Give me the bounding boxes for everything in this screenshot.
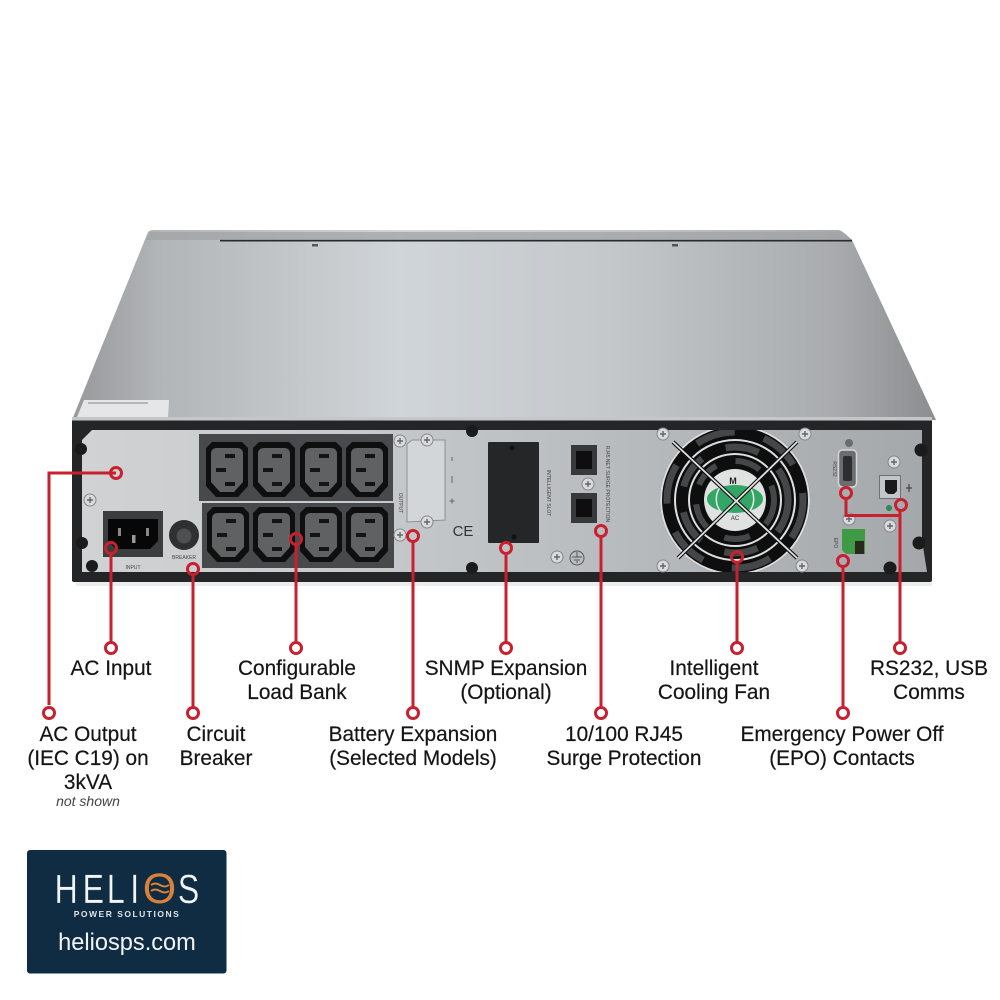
label: load bank: Configurable xyxy=(238,657,356,680)
callout: AC input xyxy=(106,542,116,654)
callout: circuit breaker xyxy=(188,564,198,718)
callout: RS232 and USB xyxy=(840,488,906,654)
callout: AC output xyxy=(44,468,122,718)
panel: output outlet bank: OUTPUT xyxy=(397,493,403,513)
callout: load bank xyxy=(290,534,302,654)
label: battery expansion: Battery Expansion xyxy=(329,723,497,746)
label: battery expansion: (Selected Models) xyxy=(329,747,497,770)
callout: SNMP expansion xyxy=(500,542,512,654)
logo panel: Helios xyxy=(27,850,226,974)
label: AC output: not shown xyxy=(56,793,120,809)
callout: RJ45 surge protection xyxy=(596,526,606,718)
label: cooling fan xyxy=(658,657,770,704)
panel: battery expansion cover xyxy=(394,434,473,541)
label: cooling fan: Cooling Fan xyxy=(658,681,770,704)
logo tagline: POWER SOLUTIONS xyxy=(74,909,180,919)
label: RJ45 surge protection: Surge Protection xyxy=(547,747,701,770)
label: RS232 and USB: Comms xyxy=(893,681,965,704)
label: RS232 and USB: RS232, USB xyxy=(870,657,988,680)
icon: USB port xyxy=(880,456,912,532)
panel: battery expansion cover: CE xyxy=(453,523,473,540)
icon: RJ45 ports: RJ45 NET SURGE PROTECTION xyxy=(604,446,610,523)
label: EPO contacts: (EPO) Contacts xyxy=(769,747,915,770)
label: battery expansion xyxy=(329,723,497,770)
icon: RS232 port: RS232 xyxy=(831,461,837,477)
panel: SNMP expansion slot: INTELLIGENT SLOT xyxy=(545,470,551,516)
label: AC output xyxy=(27,723,149,809)
logo website: heliosps.com xyxy=(58,930,196,956)
logo icon: orange O with waves: O xyxy=(143,865,176,913)
icon: cooling fan: AC xyxy=(731,516,740,522)
icon: AC input socket: INPUT xyxy=(126,565,140,571)
label: SNMP expansion: (Optional) xyxy=(460,681,552,704)
label: RJ45 surge protection xyxy=(547,723,701,770)
label: load bank xyxy=(238,657,356,704)
callout: cooling fan xyxy=(732,552,742,654)
label: circuit breaker: Breaker xyxy=(180,747,252,770)
label: EPO contacts xyxy=(740,723,944,770)
label: AC output: AC Output xyxy=(39,723,137,746)
icon: cooling fan: M xyxy=(729,476,737,486)
infographic: UPS rear panel xyxy=(27,230,987,974)
panel: UPS rear face xyxy=(72,417,932,582)
label: AC output: (IEC C19) on xyxy=(27,747,149,770)
label: SNMP expansion: SNMP Expansion xyxy=(425,657,587,680)
label: RS232 and USB xyxy=(870,657,988,704)
callout: EPO contacts xyxy=(838,556,848,718)
label: cooling fan: Intelligent xyxy=(669,657,759,680)
label: EPO contacts: Emergency Power Off xyxy=(740,723,944,746)
icon: circuit breaker: BREAKER xyxy=(172,555,196,561)
icon: cooling fan xyxy=(657,425,811,575)
icon: EPO terminal xyxy=(832,513,865,554)
label: RJ45 surge protection: 10/100 RJ45 xyxy=(565,723,683,746)
label: AC output: 3kVA xyxy=(64,771,112,794)
label: load bank: Load Bank xyxy=(247,681,347,704)
label: SNMP expansion xyxy=(425,657,587,704)
panel: output outlet bank xyxy=(199,434,403,568)
icon: circuit breaker xyxy=(169,520,199,561)
icon: ground terminal xyxy=(551,551,584,565)
logo wordmark letters: HELIS xyxy=(55,866,199,912)
label: AC input: AC Input xyxy=(71,657,152,680)
shadow under unit xyxy=(76,582,932,586)
icon: AC input socket xyxy=(103,511,163,571)
label: circuit breaker: Circuit xyxy=(187,723,246,746)
panel: SNMP expansion slot xyxy=(488,442,551,543)
icon: RS232 port xyxy=(831,439,856,487)
icon: RJ45 ports xyxy=(571,445,610,523)
icon: EPO terminal: EPO xyxy=(832,538,838,548)
panel: UPS top cover xyxy=(72,230,936,420)
callout: battery expansion xyxy=(408,530,418,718)
label: circuit breaker xyxy=(180,723,252,770)
